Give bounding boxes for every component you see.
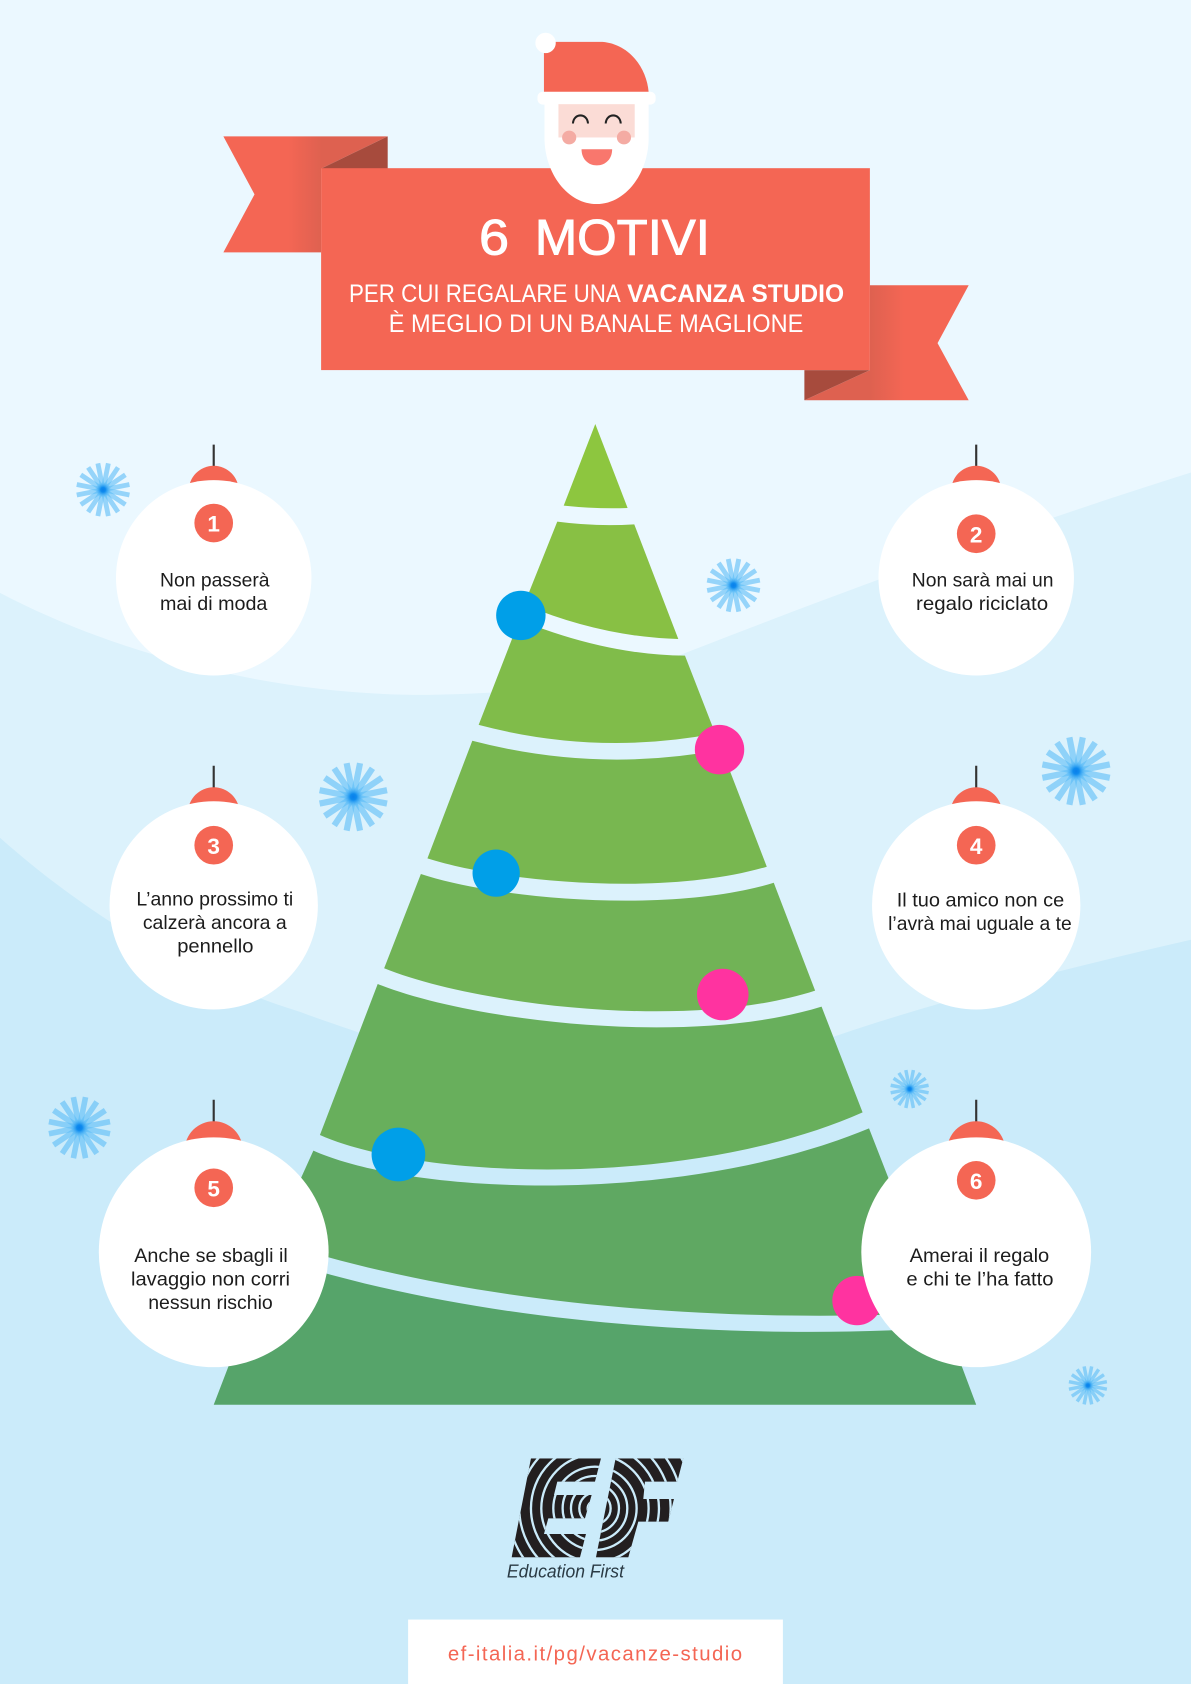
text 4 xyxy=(888,890,1072,935)
ornament: blue 1 xyxy=(496,591,546,640)
bauble 5 xyxy=(99,1100,329,1367)
subtitle: È MEGLIO DI UN BANALE MAGLIONE xyxy=(389,311,803,338)
bauble 4 xyxy=(872,766,1080,1010)
number 3 xyxy=(194,826,233,865)
title xyxy=(349,209,844,338)
text 3 xyxy=(136,889,293,958)
ribbon banner xyxy=(223,136,969,400)
text 6 xyxy=(906,1246,1054,1291)
subtitle: PER CUI REGALARE UNA xyxy=(349,281,621,308)
number 6: 6 xyxy=(970,1169,982,1194)
number 5 xyxy=(194,1168,233,1207)
footer url: ef-italia.it/pg/vacanze-studio xyxy=(448,1643,742,1665)
ornament: pink 1 xyxy=(695,725,744,774)
text 2 xyxy=(912,570,1054,615)
text 6: Amerai il regalo xyxy=(910,1246,1049,1267)
tree tier 6 xyxy=(273,1128,941,1316)
number 4: 4 xyxy=(970,834,983,859)
santa hat xyxy=(544,42,649,92)
text 3: pennello xyxy=(177,937,253,958)
santa eyes xyxy=(573,115,621,124)
text 6: e chi te l’ha fatto xyxy=(906,1270,1054,1291)
icon: snowflake 3 xyxy=(320,763,387,831)
bauble 6 xyxy=(861,1100,1091,1367)
title: 6 motivi: 6 xyxy=(479,209,509,266)
tree tier 0 xyxy=(564,424,628,508)
ornament: pink 2 xyxy=(697,969,749,1020)
ribbon right fold xyxy=(804,370,870,400)
text 3: L’anno prossimo ti xyxy=(136,889,293,910)
bauble 3 xyxy=(110,766,318,1010)
ornament: blue 2 xyxy=(473,850,520,897)
text 5 xyxy=(131,1246,290,1314)
santa face xyxy=(558,104,635,137)
text 5: Anche se sbagli il xyxy=(134,1246,288,1267)
logo mark xyxy=(512,1458,684,1558)
santa hat brim xyxy=(538,92,656,105)
ornament: pink 3 xyxy=(832,1276,882,1325)
tree tier 3 xyxy=(427,741,767,884)
santa beard xyxy=(544,102,649,204)
logo: EF Education First xyxy=(507,1458,684,1578)
text 2: Non sarà mai un xyxy=(912,570,1054,591)
ribbon left fold xyxy=(321,136,388,169)
footer url box xyxy=(408,1620,783,1684)
santa cheeks xyxy=(562,131,631,144)
subtitle xyxy=(349,281,844,338)
background hill: front xyxy=(0,838,1191,1684)
number 5: 5 xyxy=(207,1176,220,1201)
text 4: l’avrà mai uguale a te xyxy=(888,914,1072,935)
text 5: nessun rischio xyxy=(148,1293,273,1314)
ribbon right tail xyxy=(804,285,969,400)
bauble 2 xyxy=(878,445,1074,676)
text 1 xyxy=(160,570,270,615)
number 3: 3 xyxy=(207,834,220,859)
icon: snowflake 2 xyxy=(707,559,760,612)
santa mouth xyxy=(582,149,612,165)
number 6 xyxy=(957,1161,996,1200)
background hill: back xyxy=(0,473,1191,1684)
text 1: mai di moda xyxy=(160,594,268,615)
icon: snowflake 4 xyxy=(1042,737,1110,805)
subtitle: VACANZA STUDIO xyxy=(627,281,844,308)
bauble 1 xyxy=(116,445,311,676)
number 2 xyxy=(957,514,996,553)
ribbon main panel xyxy=(321,168,870,370)
logo wordmark: Education First xyxy=(507,1561,625,1582)
icon: snowflake 5 xyxy=(891,1070,929,1108)
number 2: 2 xyxy=(970,522,982,547)
icon: snowflake 1 xyxy=(77,463,129,516)
ornament: blue 3 xyxy=(372,1128,425,1181)
text 3: calzerà ancora a xyxy=(143,913,287,934)
icon: snowflake 7 xyxy=(1069,1366,1107,1404)
tree tier 4 xyxy=(384,874,815,1011)
santa hat pompom xyxy=(535,33,556,53)
text 2: regalo riciclato xyxy=(916,594,1048,615)
tree tier 7 xyxy=(214,1257,976,1405)
number 4 xyxy=(957,826,996,865)
christmas tree xyxy=(214,424,976,1405)
number 1 xyxy=(194,504,233,542)
number 1: 1 xyxy=(207,512,220,537)
icon: Santa Claus xyxy=(535,33,656,204)
title: 6 motivi: MOTIVI xyxy=(535,209,710,266)
tree tier 1 xyxy=(524,522,678,639)
icon: snowflake 6 xyxy=(49,1097,110,1158)
tree tier 5 xyxy=(320,984,863,1169)
ribbon left tail xyxy=(223,136,388,252)
tree tier 2 xyxy=(479,620,715,743)
text 1: Non passerà xyxy=(160,570,270,591)
text 5: lavaggio non corri xyxy=(131,1270,290,1291)
text 4: Il tuo amico non ce xyxy=(897,890,1064,911)
